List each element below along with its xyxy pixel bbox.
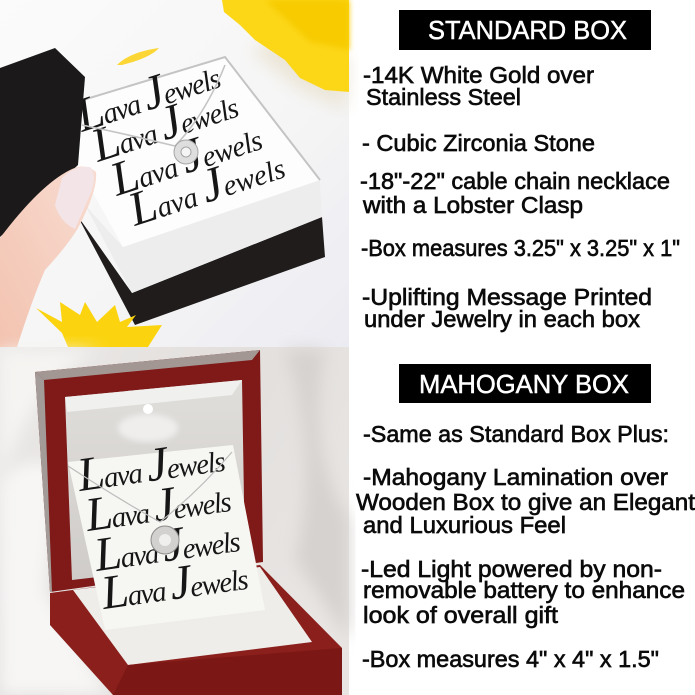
- text: lamination: Wooden Box to give an Elegant: [356, 489, 695, 515]
- text: card message lines: Lava Jewels: [81, 469, 234, 542]
- text: card message lines: [73, 429, 251, 620]
- icon: mahogany base: [50, 565, 342, 695]
- text: box message lines: [68, 46, 291, 237]
- icon: silk folds: [0, 350, 349, 695]
- icon: black box lid: [0, 48, 85, 237]
- icon: yellow petal: [117, 48, 159, 65]
- icon: message card: [68, 445, 265, 630]
- heading: standard box: [399, 10, 651, 50]
- panel: mahogany box photo: [0, 347, 349, 695]
- text: box message lines: Lava Jewels: [84, 76, 244, 173]
- text: card message lines: Lava Jewels: [97, 547, 251, 620]
- text: same as standard: -Same as Standard Box Plus:: [363, 421, 669, 447]
- panel: mahogany box specifications: [356, 364, 695, 672]
- text: card message lines: Lava Jewels: [90, 509, 243, 582]
- text: box message lines: Lava Jewels: [103, 108, 268, 207]
- text: box message lines: Lava Jewels: [68, 46, 226, 143]
- text: message: -Uplifting Message Printed: [362, 284, 652, 310]
- text: chain: -18"-22" cable chain necklace: [360, 168, 670, 194]
- text: chain: with a Lobster Clasp: [362, 192, 583, 218]
- icon: necklace pendant: [68, 452, 232, 554]
- text: box size: -Box measures 3.25" x 3.25" x 1": [361, 235, 680, 261]
- text: stone: - Cubic Zirconia Stone: [362, 130, 595, 156]
- heading: mahogany box: [399, 364, 651, 403]
- text: message: under Jewelry in each box: [364, 306, 641, 332]
- text: message: [362, 284, 652, 332]
- panel: standard box photo: [0, 0, 349, 347]
- text: mahogany box size: -Box measures 4" x 4" x 1.5": [362, 646, 659, 672]
- heading: standard box: STANDARD BOX: [428, 15, 627, 45]
- text: chain: [360, 168, 670, 218]
- text: box message lines: Lava Jewels: [121, 137, 291, 237]
- text: led light: look of overall gift: [363, 602, 559, 628]
- icon: mahogany lid: [35, 350, 263, 592]
- text: led light: [361, 556, 685, 628]
- text: card message lines: Lava Jewels: [73, 429, 228, 502]
- text: led light: -Led Light powered by non-: [361, 556, 662, 582]
- panel: standard box specifications: [360, 10, 680, 332]
- text: lamination: [356, 464, 695, 538]
- text: lamination: and Luxurious Feel: [363, 512, 566, 538]
- icon: white gift box with black base: [75, 57, 325, 325]
- heading: mahogany box: MAHOGANY BOX: [419, 369, 629, 399]
- text: led light: removable battery to enhance: [363, 577, 685, 603]
- text: material: -14K White Gold over: [363, 62, 594, 88]
- text: lamination: -Mahogany Lamination over: [363, 464, 668, 490]
- icon: yellow flower bottom: [36, 302, 162, 347]
- icon: yellow flower top right: [222, 0, 349, 110]
- icon: hand finger: [0, 166, 96, 347]
- text: material: [363, 62, 594, 110]
- icon: necklace: [82, 65, 225, 164]
- text: material: Stainless Steel: [366, 84, 521, 110]
